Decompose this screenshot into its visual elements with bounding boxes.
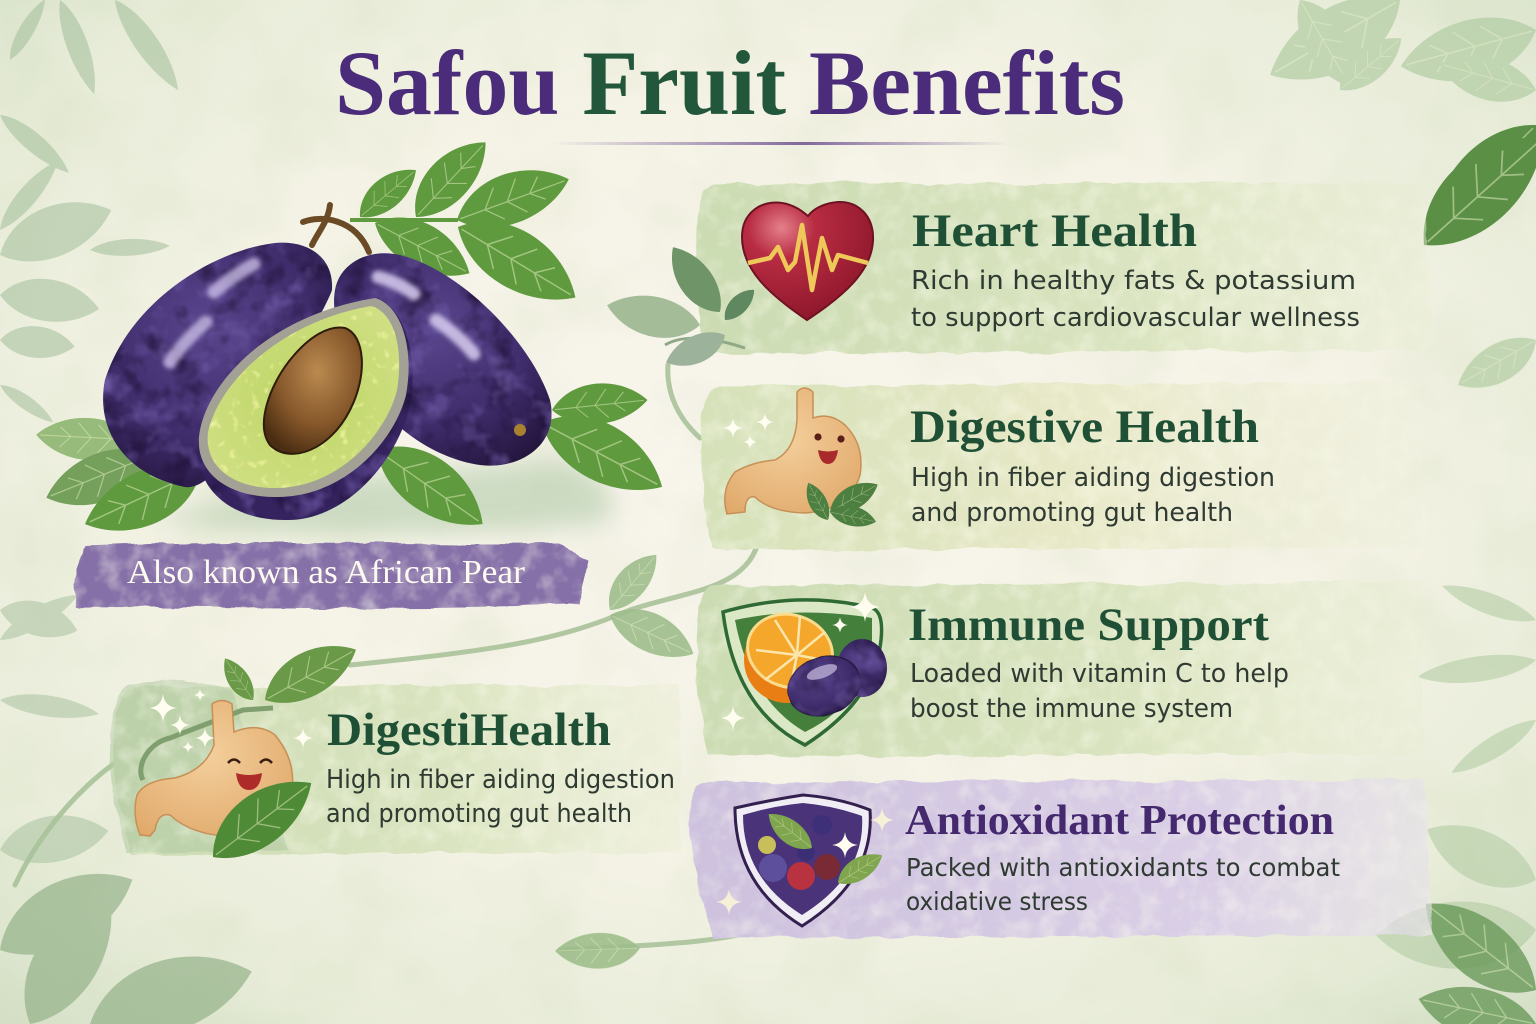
heading: Antioxidant Protection xyxy=(905,798,1334,844)
description: Rich in healthy fats & potassium xyxy=(911,266,1356,296)
description xyxy=(906,853,1340,916)
description: and promoting gut health xyxy=(911,498,1233,528)
heading: Immune Support xyxy=(908,599,1269,651)
icon: shield with orange and fruit xyxy=(721,592,887,745)
stems xyxy=(303,205,369,252)
description: High in fiber aiding digestion xyxy=(326,765,675,795)
icon: smiling stomach xyxy=(723,388,883,531)
description: Loaded with vitamin C to help xyxy=(910,659,1289,689)
icon: leaf above stomach xyxy=(216,629,366,718)
description: to support cardiovascular wellness xyxy=(911,303,1360,333)
heading: Heart Health xyxy=(912,205,1197,257)
background foliage: right and bottom right xyxy=(1375,577,1536,1024)
bottom leaves xyxy=(35,378,676,550)
description xyxy=(911,463,1275,528)
banner: also known as: Also known as African Pear xyxy=(127,554,526,591)
right fruit xyxy=(334,253,552,466)
icon: heart with pulse xyxy=(742,202,873,320)
cut half fruit xyxy=(198,298,413,520)
description: High in fiber aiding digestion xyxy=(911,463,1275,493)
panel: immune support xyxy=(696,582,1422,756)
description xyxy=(910,659,1289,724)
description xyxy=(911,266,1360,333)
description: Packed with antioxidants to combat xyxy=(906,853,1340,882)
panel: heart health xyxy=(603,182,1432,376)
soft shadow xyxy=(150,460,613,534)
panel: digestihealth xyxy=(110,629,680,876)
description: and promoting gut health xyxy=(326,799,632,829)
left fruit xyxy=(103,243,332,487)
description: oxidative stress xyxy=(906,887,1088,916)
background foliage: top right xyxy=(1255,0,1536,403)
panel: digestive health xyxy=(701,382,1422,550)
heading: DigestiHealth xyxy=(327,704,611,756)
background foliage: left and bottom left xyxy=(0,586,262,1024)
seed xyxy=(264,327,362,454)
illustration: safou fruit xyxy=(35,127,676,550)
vine connector xyxy=(15,365,775,950)
title: Safou Fruit Benefits xyxy=(335,32,1125,134)
icon: leaves beside heart xyxy=(603,238,760,376)
description: boost the immune system xyxy=(910,694,1233,724)
panel: antioxidant protection xyxy=(690,780,1432,938)
branch leaves xyxy=(349,127,591,320)
icon: happy stomach xyxy=(135,689,326,876)
banner: also known as xyxy=(72,543,590,608)
background foliage: top left xyxy=(0,0,188,427)
description xyxy=(326,765,675,829)
icon: shield with berries xyxy=(716,795,894,926)
vine leaves xyxy=(554,544,702,970)
heading: Digestive Health xyxy=(910,401,1259,453)
